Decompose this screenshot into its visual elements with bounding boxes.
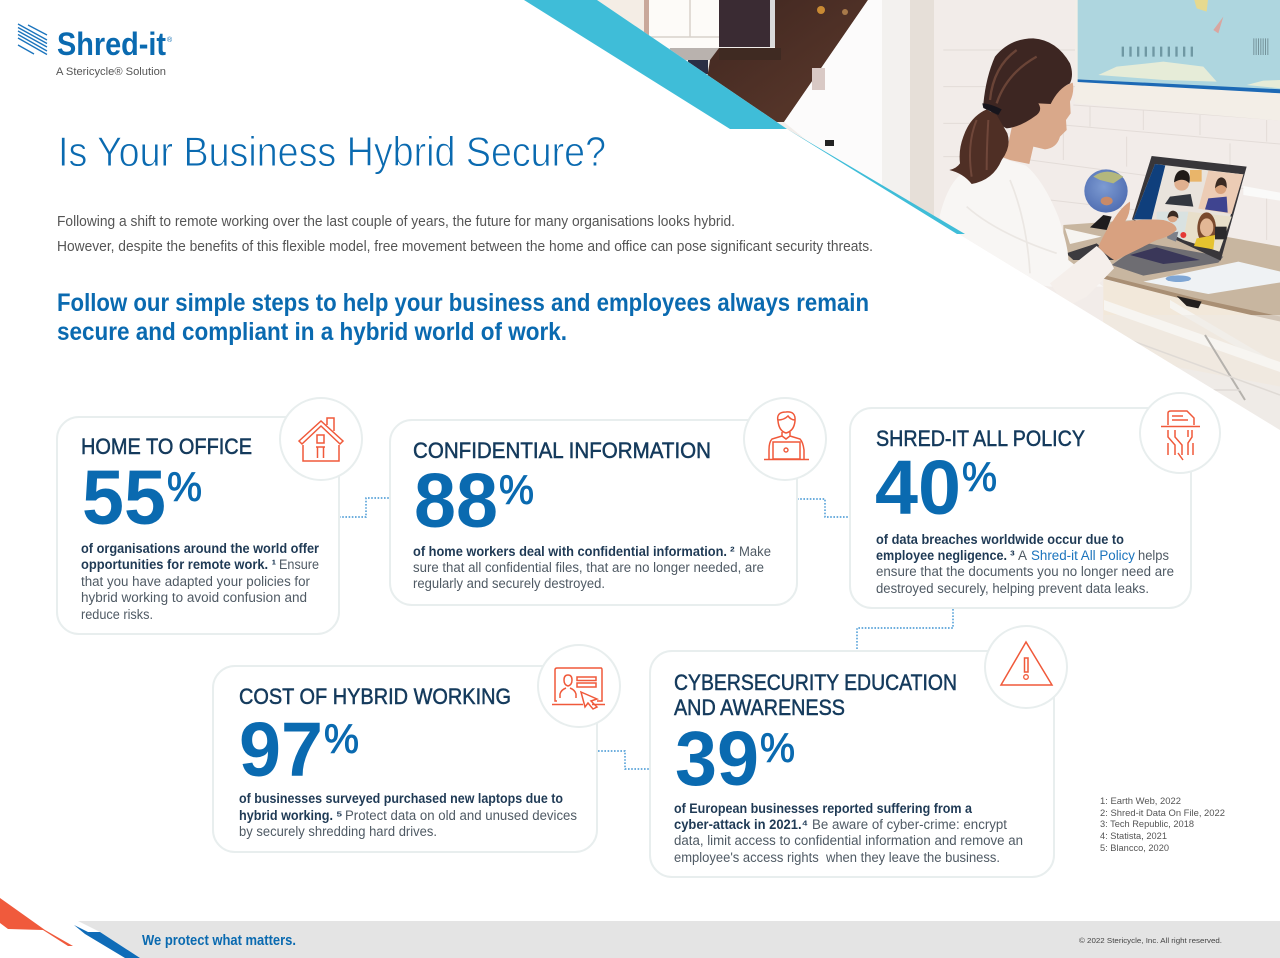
statistic: 55%: 55 bbox=[82, 455, 166, 541]
icon: person at laptop bbox=[744, 398, 826, 480]
icon: house bbox=[280, 398, 362, 480]
hair tie bbox=[982, 103, 1002, 115]
body text: Protect data on old and unused devices bbox=[345, 808, 577, 823]
neck and face bbox=[997, 83, 1073, 164]
body text bbox=[674, 800, 1023, 865]
body text bbox=[81, 540, 319, 622]
wordmark: Shred-it bbox=[57, 26, 166, 62]
heading: CYBERSECURITY EDUCATION bbox=[674, 670, 957, 695]
icon: laptop screen with profile and cursor bbox=[538, 645, 620, 727]
hand bbox=[1098, 202, 1177, 261]
logo: Shred-it bbox=[18, 24, 173, 78]
panel: shred-it all policy bbox=[850, 393, 1220, 608]
panel: cybersecurity education and awareness bbox=[650, 626, 1067, 877]
body text: hybrid working. bbox=[239, 807, 333, 823]
body text: ⁵ bbox=[336, 807, 343, 823]
panel: cost of hybrid working bbox=[213, 645, 620, 852]
map bbox=[1075, 50, 1280, 120]
strapline: A Stericycle® Solution bbox=[56, 66, 166, 78]
dotted connector: cost to cybersecurity bbox=[598, 751, 649, 769]
body text: A bbox=[1018, 548, 1027, 563]
desk bbox=[1063, 220, 1280, 320]
statistic: 88%: 88 bbox=[414, 458, 498, 544]
references: 1: Earth Web, 2022 bbox=[1100, 796, 1181, 807]
card outline bbox=[213, 666, 597, 852]
body text: by securely shredding hard drives. bbox=[239, 824, 437, 839]
footer blue shape bbox=[74, 925, 140, 958]
card outline bbox=[650, 651, 1054, 877]
body text: helps bbox=[1138, 548, 1169, 563]
body text: ensure that the documents you no longer need are bbox=[876, 564, 1174, 579]
title: Is Your Business Hybrid Secure? bbox=[58, 128, 606, 175]
body text: of businesses surveyed purchased new laptops due to bbox=[239, 790, 563, 806]
panel: home to office bbox=[57, 398, 362, 634]
tagline: We protect what matters. bbox=[142, 933, 296, 949]
references: 4: Statista, 2021 bbox=[1100, 831, 1167, 842]
dotted connector: home to confidential bbox=[339, 498, 390, 517]
body text: Be aware of cyber-crime: encrypt bbox=[812, 817, 1007, 832]
sleeve bbox=[1050, 246, 1114, 286]
ponytail bbox=[949, 109, 1009, 184]
body text: Ensure bbox=[279, 557, 319, 572]
intro text bbox=[57, 214, 873, 255]
body text: of home workers deal with confidential information. bbox=[413, 543, 727, 559]
copyright: © 2022 Stericycle, Inc. All right reserved. bbox=[1079, 936, 1222, 945]
heading: HOME TO OFFICE bbox=[81, 434, 252, 459]
body text bbox=[239, 790, 577, 839]
statistic: 39%: 39 bbox=[675, 716, 759, 802]
body text: Make bbox=[739, 544, 771, 559]
statistic: 97%: % bbox=[324, 716, 359, 762]
statistic: 39%: % bbox=[760, 725, 795, 771]
body text: reduce risks. bbox=[81, 607, 153, 622]
body text: hybrid working to avoid confusion and bbox=[81, 590, 307, 605]
intro text: However, despite the benefits of this flexible model, free movement between the home and office can pose significant security threats. bbox=[57, 239, 873, 255]
footer band bbox=[78, 921, 1280, 958]
heading bbox=[674, 670, 957, 720]
panel: confidential information bbox=[390, 398, 826, 605]
icon: warning triangle bbox=[985, 626, 1067, 708]
body text: regularly and securely destroyed. bbox=[413, 576, 605, 591]
body text: employee negligence. bbox=[876, 547, 1007, 563]
body text: cyber-attack in 2021.⁴ bbox=[674, 816, 808, 832]
statistic: 88%: % bbox=[499, 467, 534, 513]
body text: ³ bbox=[1010, 547, 1015, 563]
body text: sure that all confidential files, that are no longer needed, are bbox=[413, 560, 764, 575]
globe bbox=[1090, 215, 1112, 230]
body text bbox=[876, 531, 1174, 596]
footer orange shape bbox=[0, 898, 73, 946]
body text: that you have adapted your policies for bbox=[81, 574, 310, 589]
references bbox=[1100, 796, 1225, 854]
statistic: 97%: 97 bbox=[239, 707, 323, 793]
references: 3: Tech Republic, 2018 bbox=[1100, 819, 1194, 830]
subheading bbox=[57, 289, 869, 346]
icon: shredder bbox=[1140, 393, 1220, 473]
card outline bbox=[390, 420, 797, 605]
body text: Shred-it All Policy bbox=[1031, 548, 1135, 563]
card outline bbox=[57, 417, 339, 634]
intro text: Following a shift to remote working over the last couple of years, the future for many organisations looks hybrid. bbox=[57, 214, 735, 230]
teal diagonal band bbox=[524, 0, 965, 234]
subheading: secure and compliant in a hybrid world of work. bbox=[57, 318, 567, 346]
card outline bbox=[850, 408, 1191, 608]
photo: woman on a video call at a home desk bbox=[590, 0, 1280, 440]
statistic: 55%: % bbox=[167, 464, 202, 510]
logo stripes bbox=[18, 24, 47, 54]
laptop bbox=[1112, 243, 1223, 276]
body text: destroyed securely, helping prevent data leaks. bbox=[876, 581, 1149, 596]
body text: ² bbox=[730, 543, 735, 559]
registered mark: ® bbox=[167, 36, 173, 44]
heading: AND AWARENESS bbox=[674, 695, 845, 720]
references: 2: Shred-it Data On File, 2022 bbox=[1100, 808, 1225, 819]
paper bbox=[1143, 262, 1280, 294]
hair bbox=[983, 38, 1072, 128]
heading: CONFIDENTIAL INFORMATION bbox=[413, 438, 711, 463]
dotted connector: confidential to policy bbox=[797, 499, 850, 517]
wall ledge bbox=[1243, 186, 1280, 201]
heading: COST OF HYBRID WORKING bbox=[239, 684, 511, 709]
references: 5: Blancco, 2020 bbox=[1100, 843, 1169, 854]
subheading: Follow our simple steps to help your business and employees always remain bbox=[57, 289, 869, 317]
body text bbox=[413, 543, 771, 591]
body text: employee's access rights when they leave the business. bbox=[674, 850, 1000, 865]
statistic: 40%: 40 bbox=[875, 445, 961, 531]
dotted connector: policy to cybersecurity bbox=[857, 609, 953, 651]
statistic: 40%: % bbox=[962, 454, 997, 500]
body text: of data breaches worldwide occur due to bbox=[876, 531, 1124, 547]
body text: opportunities for remote work. ¹ bbox=[81, 556, 276, 572]
body text: of organisations around the world offer bbox=[81, 540, 319, 556]
notebook and pad bbox=[1065, 228, 1102, 244]
heading: SHRED-IT ALL POLICY bbox=[876, 426, 1085, 451]
body text: of European businesses reported suffering from a bbox=[674, 800, 972, 816]
wall bricks bbox=[934, 0, 1280, 367]
body text: data, limit access to confidential information and remove an bbox=[674, 833, 1023, 848]
woman: blouse bbox=[939, 156, 1103, 287]
